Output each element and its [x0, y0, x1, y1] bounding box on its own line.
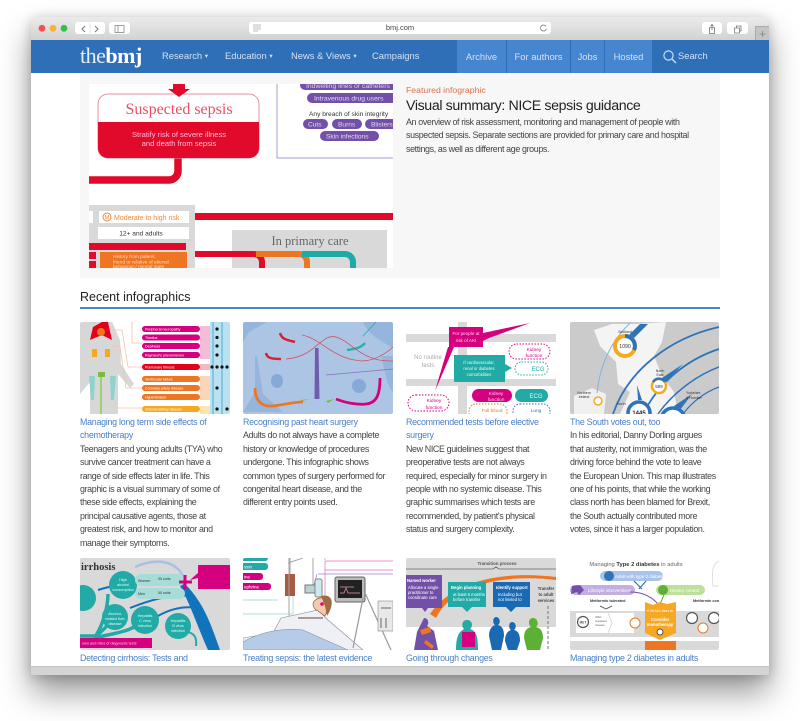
title: elective surgery: Recommended tests before elective surgery	[406, 417, 539, 440]
suspected sepsis box: Stratify risk of severe illness	[132, 130, 226, 139]
thumbnail: brexit vote map: Ireland	[579, 395, 589, 399]
title: going through changes: Going through changes	[406, 653, 493, 663]
thumbnail: type 2 diabetes pathway: Managing Type 2 diabetes in adults	[589, 562, 683, 568]
featured description: An overview of risk assessment, monitoring and management of people with suspected sepsis. Separate sections are provided for primary care and hospital settings, as well as different age groups.	[406, 117, 689, 154]
navigation bar	[31, 40, 769, 73]
thumbnail: cirrhosis: consumption	[112, 588, 134, 592]
text: south votes: In his editorial, Danny Dorling argues that austerity, not immigration, was the driving force behind the vote to leave the European Union. This map illustrates one of his points, that while the working class north has been blamed for Brexit, the South actually contributed more votes, since it has a larger population.	[570, 430, 716, 534]
thumbnail: brexit vote map: Northern	[577, 391, 591, 395]
thumbnail: brexit vote map: Scotland	[618, 330, 632, 334]
thumbnail: tests before surgery: ECG	[531, 367, 545, 373]
back and forward buttons	[75, 22, 105, 34]
risk table: History from patient,	[113, 254, 156, 260]
thumbnail: type 2 diabetes pathway: monotherapy	[647, 622, 674, 627]
thumbnail: past heart surgery	[243, 322, 393, 414]
thumbnail: type 2 diabetes pathway	[570, 560, 719, 650]
thumbnail: cirrhosis	[80, 558, 230, 650]
thumbnail: brexit vote map: East	[656, 373, 664, 377]
thumbnail: transition process: to adult	[538, 592, 554, 597]
thumbnail: chemotherapy side effects: Tinnitus	[145, 336, 158, 340]
thumbnail: tests before surgery: Kidney	[489, 391, 504, 397]
tabs button	[727, 22, 748, 34]
thumbnail: tests before surgery: function	[426, 405, 443, 411]
search label: Search	[678, 50, 708, 61]
title: cirrhosis: Detecting cirrhosis: Tests and	[80, 653, 188, 663]
suspected sepsis connector	[89, 154, 178, 180]
thumbnail: cirrhosis: ions and risks of diagnostic tests	[82, 642, 137, 646]
thumbnail: chemotherapy side effects: Peripheral neuropathy	[145, 328, 181, 332]
risk table	[89, 205, 195, 270]
risk table: M	[104, 216, 110, 222]
thumbnail: chemotherapy side effects: Pulmonary fibrosis	[145, 366, 175, 370]
share button	[702, 22, 722, 34]
thumbnail: type 2 diabetes pathway: Consider	[651, 617, 669, 622]
thumbnail: brexit vote map: 589	[655, 384, 663, 389]
nav tab: archive	[457, 40, 506, 73]
in primary care box: In primary care	[271, 234, 349, 248]
thumbnail: cirrhosis: infection	[138, 624, 152, 628]
thumbnail: chemotherapy side effects: Chronic kidney disease	[145, 408, 182, 412]
risk factors box: Blisters	[371, 122, 393, 128]
title: type 2 diabetes: Managing type 2 diabetes in adults	[570, 653, 698, 663]
card: south votes	[570, 322, 719, 534]
window footer strip	[31, 666, 769, 675]
card: cirrhosis	[80, 558, 230, 663]
suspected sepsis box: and death from sepsis	[142, 139, 217, 148]
suspected sepsis box	[98, 84, 259, 158]
thumbnail: transition process: Allocate a single	[408, 585, 439, 590]
thumbnail: cirrhosis: Hepatitis	[171, 619, 185, 623]
risk factors box: Skin infections	[326, 134, 369, 140]
thumbnail: transition process: Identify support	[496, 585, 528, 590]
thumbnail: chemotherapy side effects: Raynaud's phenomenon	[145, 354, 184, 358]
sidebar button	[109, 22, 130, 34]
thumbnail: cirrhosis: disease	[108, 622, 122, 626]
thumbnail: tests before surgery: Kidney	[527, 347, 542, 353]
browser toolbar	[31, 17, 769, 40]
search icon	[663, 50, 676, 64]
nav tab: jobs: Jobs	[578, 51, 597, 62]
thumbnail: type 2 diabetes pathway: Metformin tolerated	[590, 599, 626, 603]
new tab button: +	[759, 27, 766, 41]
nav tab: hosted: Hosted	[614, 51, 643, 62]
thumbnail: cirrhosis: irrhosis	[81, 562, 115, 573]
thumbnail: tests before surgery: risk of AKI	[456, 338, 476, 343]
thumbnail: transition process: Named worker	[407, 578, 436, 583]
thumbnail: patient in intensive care: ine	[244, 574, 251, 580]
thumbnail: patient in intensive care: ephrine	[244, 584, 260, 590]
thumbnail: tests before surgery: Full blood	[482, 408, 503, 414]
thumbnail: chemotherapy side effects: Ventricular failure	[145, 378, 173, 382]
risk factors box: Cuts	[308, 122, 322, 128]
in primary care box	[232, 230, 387, 268]
card: elective surgery	[406, 322, 556, 534]
thumbnail: transition process: before transfer	[453, 597, 481, 602]
nav tab: for authors	[507, 40, 570, 73]
thumbnail: type 2 diabetes pathway: Adult with type 2 diabetes	[615, 574, 667, 579]
risk factors box	[277, 80, 405, 158]
nav link: research: Research ▾	[162, 50, 208, 61]
thumbnail: transition process: Including but	[498, 592, 523, 597]
thumbnail: patient in intensive care: ssin	[244, 564, 252, 570]
thumbnail: cirrhosis: 35 units	[158, 577, 171, 581]
address bar: bmj.com	[386, 23, 414, 32]
section heading: Recent infographics	[80, 290, 190, 304]
thumbnail: transition process: Transfer	[538, 586, 555, 591]
thumbnail: chemotherapy side effects: Hypertension	[145, 396, 166, 400]
thumbnail: transition process	[406, 558, 556, 650]
card: heart surgery	[243, 322, 393, 507]
thumbnail: tests before surgery	[406, 322, 556, 414]
thumbnail: tests before surgery: renal or diabetes	[463, 366, 495, 371]
thumbnail: transition process: coordinate care	[408, 595, 438, 600]
thumbnail: brexit vote map	[570, 322, 719, 414]
thumbnail: chemotherapy side effects: Deafness	[145, 344, 160, 348]
thumbnail: cirrhosis: 50 units	[158, 591, 171, 595]
risk table: Moderate to high risk	[114, 215, 180, 222]
risk table: friend or relative of altered	[113, 260, 169, 266]
new tab button	[755, 26, 769, 40]
pathway arrows	[195, 254, 353, 268]
thumbnail: tests before surgery: For people at	[452, 331, 480, 336]
thumbnail: type 2 diabetes pathway: Lifestyle interventions	[588, 588, 632, 593]
featured infographic image	[89, 84, 393, 268]
address bar	[249, 22, 551, 34]
thumbnail: transition process: not limited to	[498, 597, 522, 602]
thumbnail: type 2 diabetes pathway: Dietary control	[670, 588, 699, 593]
text: heart surgery: Adults do not always have a complete history or knowledge of procedures undergone. This infographic shows common types of surgery performed for congenital heart disease, and the different entry points used.	[243, 430, 385, 507]
thumbnail: cirrhosis: Alcohol-	[108, 612, 123, 616]
suspected sepsis box: Suspected sepsis	[125, 101, 233, 118]
thumbnail: tests before surgery: function	[526, 353, 543, 359]
thumbnail: transition process: services	[538, 598, 555, 603]
card: type 2 diabetes	[570, 560, 719, 663]
thumbnail: cirrhosis: C virus	[139, 619, 151, 623]
card: chemotherapy	[80, 322, 230, 548]
thumbnail: transition process: at least 6 months	[453, 592, 485, 597]
nav link: education: Education ▾	[225, 50, 273, 61]
thumbnail: brexit vote map: & Humber	[686, 396, 703, 400]
red band	[195, 213, 393, 220]
text: elective surgery: New NICE guidelines suggest that preoperative tests are not always required, especially for minor surgery in people with no systemic disease. This graphic summarises which tests are recommended, by patient's physical status and surgery complexity.	[406, 444, 547, 534]
nav tab: hosted	[605, 40, 652, 73]
thumbnail: cirrhosis: Women	[138, 579, 150, 583]
featured label: Featured infographic	[406, 85, 486, 95]
thumbnail: type 2 diabetes pathway: release	[595, 623, 605, 627]
thumbnail: transition process: Transition process	[477, 561, 517, 566]
title: south votes: The South votes out, too	[570, 417, 660, 427]
title: heart surgery: Recognising past heart surgery	[243, 417, 358, 427]
thumbnail: transition process: practitioner to	[408, 590, 434, 595]
thumbnail: cirrhosis: High	[119, 578, 127, 582]
thumbnail: brexit vote map: Yorkshire	[686, 391, 701, 395]
thumbnail: type 2 diabetes pathway: standard	[595, 619, 607, 623]
card: going through changes	[406, 558, 556, 663]
thumbnail: cirrhosis: B virus	[172, 624, 184, 628]
featured title: Visual summary: NICE sepsis guidance	[406, 98, 640, 114]
title: chemotherapy: Managing long term side effects of chemotherapy	[80, 417, 206, 440]
thumbnail: type 2 diabetes pathway: If HbA1c rises to	[647, 609, 673, 613]
risk factors box: Any breach of skin integrity	[309, 111, 389, 118]
risk table: 12+ and adults	[119, 230, 163, 238]
thumbnail: tests before surgery: tests	[422, 363, 434, 369]
nav link: campaigns: Campaigns	[372, 50, 419, 61]
thumbnail: tests before surgery: comorbidities	[467, 372, 491, 377]
featured panel	[80, 73, 720, 278]
thumbnail: type 2 diabetes pathway: Offer	[595, 615, 602, 619]
thumbnail: tests before surgery: Lung	[531, 408, 542, 414]
thumbnail: cirrhosis: Men	[138, 592, 145, 596]
thumbnail: brexit vote map: 1090	[619, 344, 631, 350]
text: chemotherapy: Teenagers and young adults (TYA) who survive cancer treatment can have a range of side effects later in life. This graphic is a visual summary of some of these side effects, explaining the principal causative agents, those at greatest risk, and how to monitor and manage their symptoms.	[80, 444, 222, 548]
site logo: thebmj	[80, 43, 142, 68]
thumbnail: tests before surgery: No routine	[414, 355, 443, 361]
nav tab: for authors: For authors	[515, 51, 562, 62]
nav link: news and views: News & Views ▾	[291, 50, 357, 61]
risk factors box: Intravenous drug users	[314, 96, 384, 102]
title: treating sepsis: Treating sepsis: the latest evidence	[243, 653, 372, 663]
thumbnail: cirrhosis: infection	[171, 629, 185, 633]
thumbnail: patient in intensive care	[243, 558, 393, 650]
thumbnail: tests before surgery: function	[488, 397, 505, 403]
thumbnail: tests before surgery: ECG	[529, 394, 543, 400]
section rule	[80, 307, 720, 309]
thumbnail: cirrhosis: Hepatitis	[138, 614, 152, 618]
thumbnail: chemotherapy side effects	[80, 322, 230, 414]
thumbnail: brexit vote map: North	[617, 402, 626, 406]
risk factors box: Burns	[338, 122, 356, 128]
thumbnail: cirrhosis: related liver	[105, 617, 126, 621]
nav tab: jobs	[571, 40, 604, 73]
thumbnail: transition process: Begin planning	[451, 585, 482, 590]
thumbnail: cirrhosis: alcohol	[117, 583, 129, 587]
nav tab: archive: Archive	[466, 51, 497, 62]
thumbnail: brexit vote map: North	[656, 369, 664, 373]
thumbnail: chemotherapy side effects: Coronary artery disease	[145, 386, 183, 390]
card: treating sepsis	[243, 558, 393, 663]
thumbnail: type 2 diabetes pathway: MET	[580, 620, 586, 624]
thumbnail: tests before surgery: Kidney	[427, 398, 442, 404]
window traffic lights	[38, 24, 68, 32]
thumbnail: tests before surgery: If cardiovascular,	[463, 360, 495, 365]
